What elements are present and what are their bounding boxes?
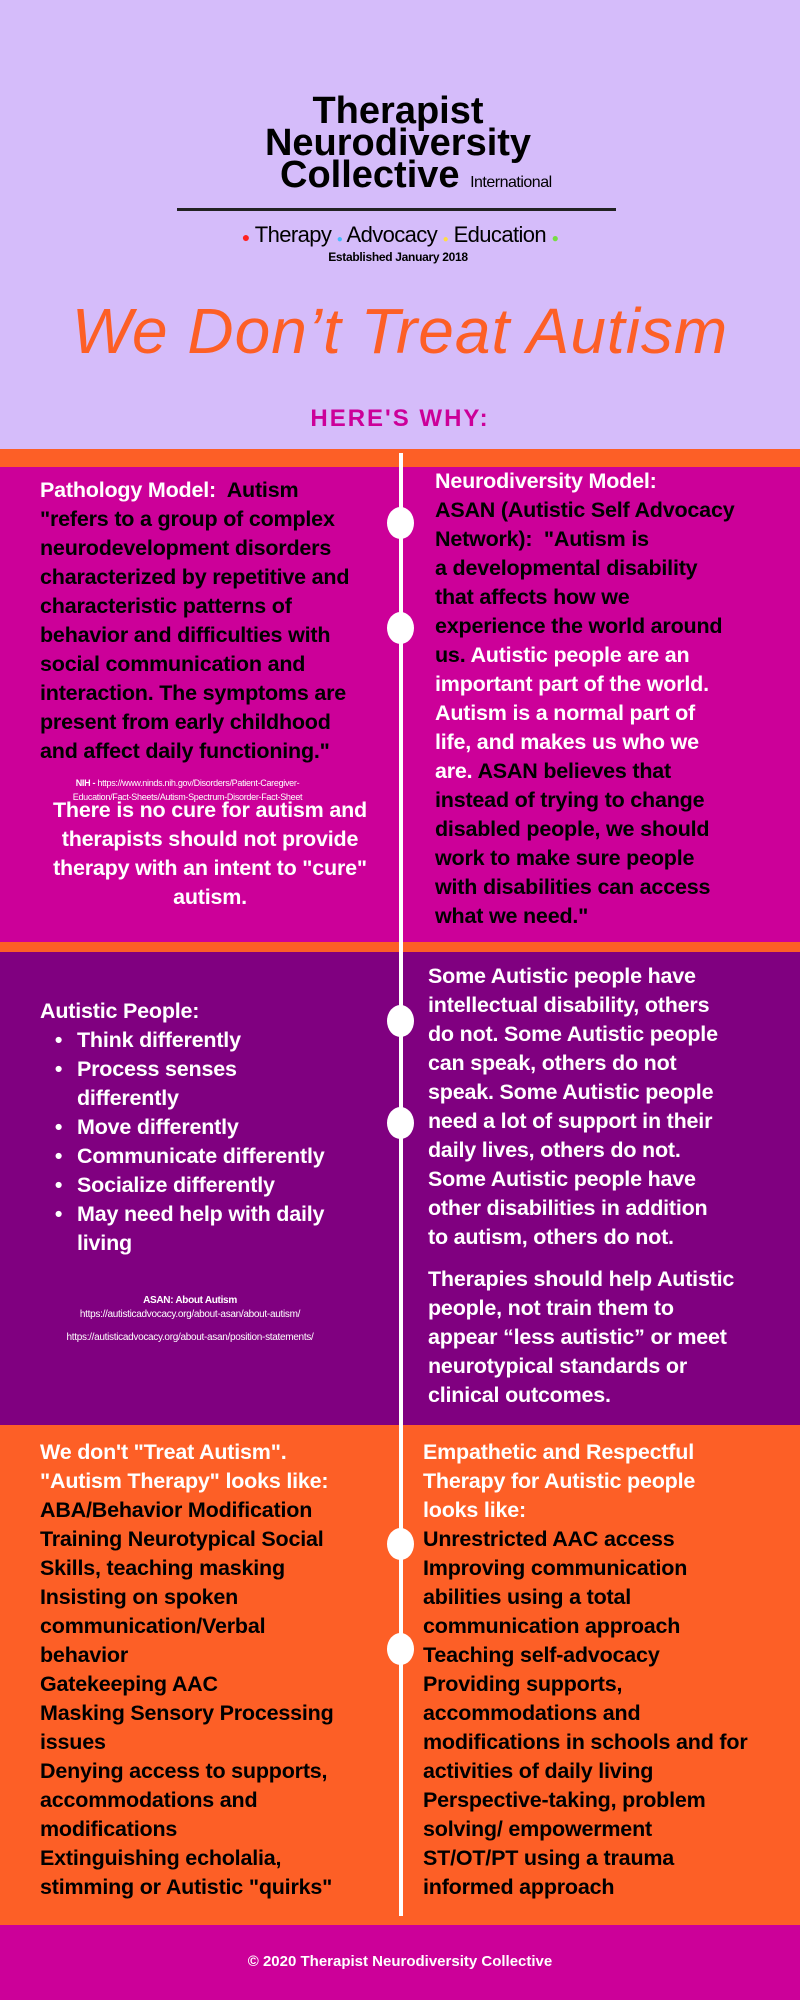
- logo title line 3: Collective International: [280, 154, 552, 196]
- panel: diversity of autistic people: do not. Some Autistic people: [428, 1022, 718, 1046]
- panel: pathology model: "refers to a group of complex: [40, 507, 335, 531]
- panel: neurodiversity model: experience the world around: [435, 614, 722, 638]
- panel: autistic people list: •: [55, 1115, 62, 1139]
- panel: neurodiversity model: that affects how we: [435, 585, 630, 609]
- panel: pathology model: characterized by repetitive and: [40, 565, 349, 589]
- panel: autism therapy looks like: Skills, teaching masking: [40, 1556, 285, 1580]
- panel: autism therapy looks like: communication/Verbal: [40, 1614, 265, 1638]
- panel: autism therapy looks like: Extinguishing echolalia,: [40, 1846, 281, 1870]
- statement: no cure: autism.: [173, 885, 247, 909]
- panel: empathetic therapy looks like: ST/OT/PT using a trauma: [423, 1846, 674, 1870]
- panel: empathetic therapy looks like: activities of daily living: [423, 1759, 653, 1783]
- panel: autistic people list: living: [77, 1231, 132, 1255]
- timeline dot: [387, 1633, 414, 1665]
- citation: NIH: Education/Fact-Sheets/Autism-Spectrum-Disorder-Fact-Sheet: [73, 792, 302, 802]
- panel: pathology model: Pathology Model: Autism: [40, 478, 298, 502]
- panel: autistic people list: Process senses: [77, 1057, 237, 1081]
- timeline dot: [387, 507, 414, 539]
- panel: autism therapy looks like: ABA/Behavior Modification: [40, 1498, 312, 1522]
- panel: autism therapy looks like: Insisting on spoken: [40, 1585, 238, 1609]
- panel: autistic people list: Move differently: [77, 1115, 239, 1139]
- panel: empathetic therapy looks like: informed approach: [423, 1875, 614, 1899]
- background bands: [0, 449, 800, 467]
- panel: autism therapy looks like: [40, 1440, 334, 1899]
- panel: neurodiversity model: what we need.": [435, 904, 588, 928]
- panel: neurodiversity model: work to make sure people: [435, 846, 694, 870]
- panel: autism therapy looks like: behavior: [40, 1643, 128, 1667]
- citation: ASAN: [67, 1295, 314, 1343]
- panel: empathetic therapy looks like: communication approach: [423, 1614, 680, 1638]
- timeline dot: [387, 1528, 414, 1560]
- panel: diversity of autistic people: speak. Some Autistic people: [428, 1080, 713, 1104]
- panel: autistic people list: differently: [77, 1086, 179, 1110]
- panel: empathetic therapy looks like: looks like:: [423, 1498, 526, 1522]
- panel: autism therapy looks like: Denying access to supports,: [40, 1759, 327, 1783]
- panel: diversity of autistic people: intellectual disability, others: [428, 993, 709, 1017]
- panel: autistic people list: •: [55, 1173, 62, 1197]
- statement: no cure: [53, 798, 367, 909]
- panel: empathetic therapy looks like: [423, 1440, 748, 1899]
- timeline dot: [387, 1005, 414, 1037]
- citation: ASAN: ASAN: About Autism: [143, 1295, 237, 1306]
- panel: empathetic therapy looks like: Perspective-taking, problem: [423, 1788, 706, 1812]
- statement: therapies should help: clinical outcomes.: [428, 1383, 611, 1407]
- main title: We Don’t Treat Autism: [72, 295, 728, 367]
- statement: no cure: There is no cure for autism and: [53, 798, 367, 822]
- panel: pathology model: neurodevelopment disorders: [40, 536, 331, 560]
- panel: neurodiversity model: Network): "Autism is: [435, 527, 649, 551]
- panel: autistic people list: Think differently: [77, 1028, 241, 1052]
- panel: diversity of autistic people: to autism, others do not.: [428, 1225, 674, 1249]
- statement: no cure: therapists should not provide: [62, 827, 358, 851]
- panel: neurodiversity model: life, and makes us who we: [435, 730, 699, 754]
- citation: NIH: [73, 778, 302, 802]
- header logo: [177, 90, 616, 264]
- citation: NIH: NIH - https://www.ninds.nih.gov/Disorders/Patient-Caregiver-: [76, 778, 299, 788]
- panel: empathetic therapy looks like: Empathetic and Respectful: [423, 1440, 694, 1464]
- panel: autism therapy looks like: Training Neurotypical Social: [40, 1527, 324, 1551]
- panel: autism therapy looks like: We don't "Treat Autism".: [40, 1440, 286, 1464]
- panel: neurodiversity model: a developmental disability: [435, 556, 697, 580]
- panel: neurodiversity model: are. ASAN believes that: [435, 759, 671, 783]
- panel: empathetic therapy looks like: accommodations and: [423, 1701, 640, 1725]
- panel: diversity of autistic people: Some Autistic people have: [428, 1167, 696, 1191]
- panel: pathology model: present from early childhood: [40, 710, 331, 734]
- timeline dot: [387, 612, 414, 644]
- panel: autistic people list: •: [55, 1028, 62, 1052]
- panel: autistic people list: [40, 999, 325, 1255]
- established: Established January 2018: [328, 250, 468, 264]
- panel: neurodiversity model: Neurodiversity Model:: [435, 469, 657, 493]
- panel: autistic people list: •: [55, 1144, 62, 1168]
- panel: empathetic therapy looks like: Providing supports,: [423, 1672, 622, 1696]
- panel: autism therapy looks like: accommodations and: [40, 1788, 257, 1812]
- statement: therapies should help: [428, 1267, 734, 1407]
- citation: ASAN: https://autisticadvocacy.org/about-asan/about-autism/: [80, 1309, 300, 1320]
- panel: diversity of autistic people: need a lot of support in their: [428, 1109, 712, 1133]
- subheading: HERE'S WHY:: [310, 405, 490, 432]
- panel: neurodiversity model: ASAN (Autistic Self Advocacy: [435, 498, 734, 522]
- statement: therapies should help: appear “less autistic” or meet: [428, 1325, 727, 1349]
- panel: pathology model: behavior and difficulties with: [40, 623, 330, 647]
- panel: empathetic therapy looks like: modifications in schools and for: [423, 1730, 748, 1754]
- panel: pathology model: characteristic patterns of: [40, 594, 292, 618]
- panel: empathetic therapy looks like: abilities using a total: [423, 1585, 631, 1609]
- panel: pathology model: interaction. The symptoms are: [40, 681, 346, 705]
- panel: autistic people list: •: [55, 1202, 62, 1226]
- panel: autism therapy looks like: stimming or Autistic "quirks": [40, 1875, 332, 1899]
- panel: empathetic therapy looks like: Therapy for Autistic people: [423, 1469, 695, 1493]
- logo title line 1: Therapist: [312, 90, 484, 132]
- panel: diversity of autistic people: other disabilities in addition: [428, 1196, 708, 1220]
- statement: therapies should help: people, not train them to: [428, 1296, 674, 1320]
- panel: diversity of autistic people: can speak, others do not: [428, 1051, 676, 1075]
- panel: autistic people list: May need help with daily: [77, 1202, 324, 1226]
- panel: neurodiversity model: us. Autistic people are an: [435, 643, 689, 667]
- panel: neurodiversity model: important part of the world.: [435, 672, 709, 696]
- panel: autistic people list: •: [55, 1057, 62, 1081]
- panel: empathetic therapy looks like: Unrestricted AAC access: [423, 1527, 675, 1551]
- panel: autistic people list: Communicate differently: [77, 1144, 324, 1168]
- panel: autistic people list: Socialize differently: [77, 1173, 275, 1197]
- panel: diversity of autistic people: Some Autistic people have: [428, 964, 696, 988]
- divider: [177, 208, 616, 211]
- tagline: ● Therapy ● Advocacy ● Education ●: [242, 222, 558, 247]
- panel: neurodiversity model: instead of trying to change: [435, 788, 704, 812]
- panel: pathology model: [40, 478, 349, 763]
- panel: pathology model: and affect daily functioning.": [40, 739, 330, 763]
- panel: diversity of autistic people: [428, 964, 718, 1249]
- statement: no cure: therapy with an intent to "cure": [53, 856, 367, 880]
- panel: neurodiversity model: with disabilities can access: [435, 875, 710, 899]
- panel: autism therapy looks like: Gatekeeping AAC: [40, 1672, 218, 1696]
- panel: autism therapy looks like: Masking Sensory Processing: [40, 1701, 334, 1725]
- panel: neurodiversity model: Autism is a normal part of: [435, 701, 695, 725]
- panel: empathetic therapy looks like: solving/ empowerment: [423, 1817, 652, 1841]
- panel: empathetic therapy looks like: Improving communication: [423, 1556, 687, 1580]
- panel: empathetic therapy looks like: Teaching self-advocacy: [423, 1643, 660, 1667]
- panel: pathology model: social communication and: [40, 652, 305, 676]
- citation: ASAN: https://autisticadvocacy.org/about-asan/position-statements/: [67, 1332, 313, 1343]
- panel: autistic people list: Autistic People:: [40, 999, 199, 1023]
- statement: therapies should help: Therapies should help Autistic: [428, 1267, 734, 1291]
- panel: autism therapy looks like: issues: [40, 1730, 106, 1754]
- footer: © 2020 Therapist Neurodiversity Collective: [248, 1953, 552, 1970]
- timeline dot: [387, 1107, 414, 1139]
- logo title line 2: Neurodiversity: [265, 122, 531, 164]
- panel: autism therapy looks like: modifications: [40, 1817, 177, 1841]
- statement: therapies should help: neurotypical standards or: [428, 1354, 687, 1378]
- panel: neurodiversity model: [435, 469, 735, 928]
- timeline line: [399, 453, 403, 1916]
- panel: autism therapy looks like: "Autism Therapy" looks like:: [40, 1469, 328, 1493]
- panel: neurodiversity model: disabled people, we should: [435, 817, 709, 841]
- panel: diversity of autistic people: daily lives, others do not.: [428, 1138, 681, 1162]
